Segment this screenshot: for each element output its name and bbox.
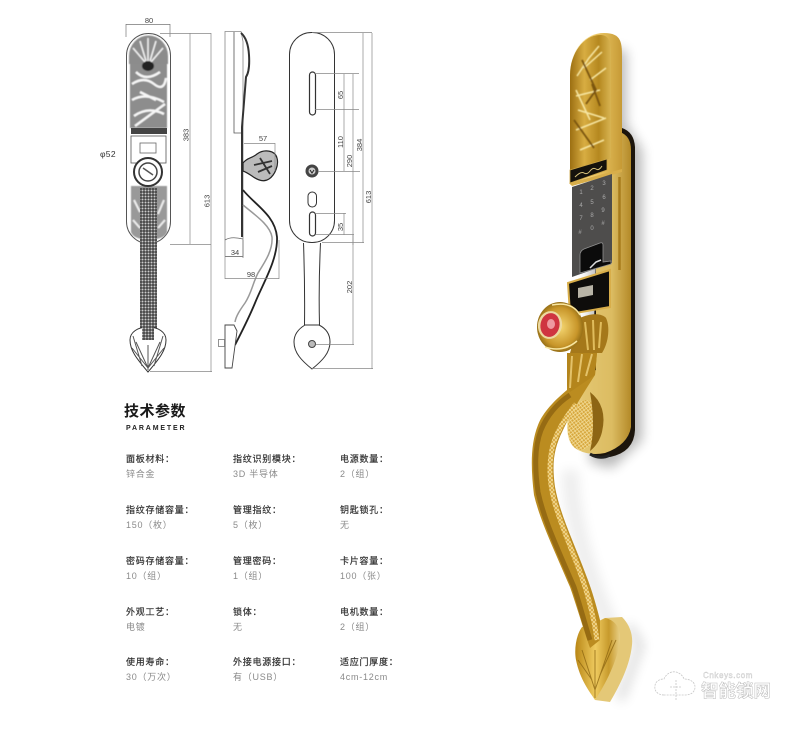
red button xyxy=(535,309,565,341)
handle scale band xyxy=(550,404,597,640)
param: admin passwords: 管理密码： xyxy=(233,556,282,566)
width dimension 80: 80 xyxy=(145,16,153,25)
upper slot xyxy=(310,72,316,115)
param: admin passwords xyxy=(233,556,282,581)
leaf veins xyxy=(578,640,616,698)
dimension 35 xyxy=(316,213,354,235)
handle dark side xyxy=(536,395,590,640)
dimension 384 xyxy=(312,32,372,243)
engraved edge xyxy=(241,33,249,237)
keypad numbers: 0 xyxy=(590,226,594,232)
back leaf end xyxy=(294,325,330,369)
side knob xyxy=(243,151,278,181)
dimension 110 xyxy=(318,110,360,172)
dimension 57: 57 xyxy=(259,134,267,143)
keypad numbers: 6 xyxy=(602,195,606,201)
keypad numbers: 5 xyxy=(590,200,594,206)
param: finish: 电镀 xyxy=(126,622,146,632)
knob neck xyxy=(570,314,608,353)
param: door thickness: 4cm-12cm xyxy=(340,672,388,682)
param: card capacity: 卡片容量： xyxy=(340,556,389,566)
back handle xyxy=(304,243,320,325)
param: motors xyxy=(340,607,389,632)
dimension 35: 35 xyxy=(336,223,345,231)
slot in rim xyxy=(618,177,621,270)
back plate dark edge xyxy=(590,125,635,457)
height dimension 613 xyxy=(150,33,212,372)
drawing: back view xyxy=(290,32,373,369)
dimension 34 xyxy=(225,240,243,258)
param: admin fingerprints: 管理指纹： xyxy=(233,505,282,515)
param: motors: 电机数量： xyxy=(340,607,389,617)
param: card capacity: 100（张） xyxy=(340,571,387,581)
dimension 65: 65 xyxy=(336,91,345,99)
knob xyxy=(537,302,583,352)
front plate outline xyxy=(126,34,170,244)
lower gold frame xyxy=(568,270,610,314)
gold bar under logo xyxy=(569,169,622,186)
diameter label: φ52 xyxy=(100,149,116,159)
keypad numbers: 1 xyxy=(579,190,583,196)
param: fingerprint capacity: 指纹存储容量： xyxy=(126,505,194,515)
param: external power: 有（USB） xyxy=(233,672,283,682)
param: lifetime xyxy=(126,656,177,682)
param: power count xyxy=(340,454,389,479)
leaf end xyxy=(130,327,166,372)
logo script mark xyxy=(575,166,602,177)
watermark url: Cnkeys.com xyxy=(703,671,753,680)
param: admin fingerprints xyxy=(233,505,282,530)
keypad numbers: # xyxy=(578,230,582,236)
dimension 290: 290 xyxy=(345,155,354,167)
fingerprint reader recess xyxy=(580,243,611,273)
param: finish: 外观工艺： xyxy=(126,607,175,617)
title: 技术参数 xyxy=(124,403,186,420)
dimension 202: 202 xyxy=(345,281,354,293)
param: lifetime: 30（万次） xyxy=(126,672,177,682)
keypad numbers: 2 xyxy=(590,186,594,192)
param: door thickness: 适应门厚度： xyxy=(340,657,399,667)
back plate xyxy=(567,132,631,454)
keypad numbers xyxy=(578,181,606,236)
dimension 57 xyxy=(244,134,275,171)
param: lock body: 锁体： xyxy=(233,607,262,617)
param: keyhole: 钥匙锁孔： xyxy=(340,505,389,515)
patterned handle xyxy=(140,188,157,333)
param: lock body: 无 xyxy=(233,622,243,632)
width dimension 80 xyxy=(126,16,170,37)
param: keyhole xyxy=(340,505,389,530)
dimension 110: 110 xyxy=(336,136,345,148)
param: lock body xyxy=(233,607,262,632)
dimension 202 xyxy=(316,235,354,345)
keypad xyxy=(572,174,612,277)
param: keyhole: 无 xyxy=(340,520,350,530)
param: panel material: 面板材料： xyxy=(126,454,175,464)
dimension 98 xyxy=(225,240,279,279)
param: power count: 2（组） xyxy=(340,469,375,479)
watermark name: 智能锁网 xyxy=(701,681,771,701)
dimension 34: 34 xyxy=(231,248,239,257)
watermark cloud xyxy=(655,672,695,700)
centre screw xyxy=(306,164,318,178)
watermark xyxy=(655,671,771,701)
param: motors: 2（组） xyxy=(340,622,375,632)
oval hole xyxy=(308,192,316,207)
param: fingerprint module xyxy=(233,454,301,479)
param: door thickness xyxy=(340,657,399,682)
drawing: front view xyxy=(100,16,212,372)
curved handle xyxy=(235,190,277,345)
dimension 613 xyxy=(312,33,373,369)
soft shadows xyxy=(590,50,642,468)
gold lock product xyxy=(532,33,642,702)
engraved upper panel xyxy=(570,35,611,177)
param: card capacity xyxy=(340,556,389,581)
back plate xyxy=(290,32,334,242)
end cap xyxy=(225,325,237,368)
handle neck texture xyxy=(567,353,597,392)
side plate xyxy=(225,32,243,256)
front body rim xyxy=(570,33,622,185)
leaf rim xyxy=(595,617,632,702)
param: admin passwords: 1（组） xyxy=(233,571,268,581)
subtitle: PARAMETER xyxy=(126,425,186,432)
param: admin fingerprints: 5（枚） xyxy=(233,520,268,530)
param: external power xyxy=(233,657,301,682)
scaled recess xyxy=(565,398,601,452)
keypad numbers: 9 xyxy=(601,208,605,214)
height dimension 613: 613 xyxy=(202,195,212,207)
param: external power: 外接电源接口： xyxy=(233,657,301,667)
height dimension 383 xyxy=(160,33,211,244)
param: fingerprint module: 3D 半导体 xyxy=(233,469,279,479)
rim bottom opening xyxy=(590,454,610,457)
parameter table xyxy=(126,454,399,682)
dimension 613: 613 xyxy=(364,191,373,203)
keypad numbers: 8 xyxy=(590,213,594,219)
knob xyxy=(134,158,162,186)
param: password capacity: 10（组） xyxy=(126,571,167,581)
keypad numbers: 4 xyxy=(579,203,583,209)
param: fingerprint capacity xyxy=(126,505,194,530)
keypad panel xyxy=(131,136,166,163)
param: panel material: 锌合金 xyxy=(126,469,155,479)
param: power count: 电源数量： xyxy=(340,454,389,464)
drawing: side view xyxy=(218,32,279,368)
keypad numbers: 3 xyxy=(602,181,606,187)
logo plate xyxy=(570,159,607,183)
sensor window xyxy=(578,285,593,298)
param: lifetime: 使用寿命： xyxy=(126,657,175,667)
dimension 384: 384 xyxy=(355,139,364,151)
keypad numbers: 7 xyxy=(579,216,583,222)
height dimension 383: 383 xyxy=(182,129,190,141)
keypad numbers: # xyxy=(601,221,605,227)
leaf face xyxy=(575,618,620,700)
dimension 98: 98 xyxy=(247,270,255,279)
param: password capacity: 密码存储容量： xyxy=(126,556,194,566)
dragon engraving xyxy=(129,35,168,240)
param: fingerprint module: 指纹识别模块： xyxy=(233,454,301,464)
param: password capacity xyxy=(126,556,194,581)
lower slot xyxy=(310,212,316,236)
dimension 65 xyxy=(315,74,359,110)
param: panel material xyxy=(126,454,175,479)
handle xyxy=(532,353,600,648)
param: finish xyxy=(126,606,175,632)
param: fingerprint capacity: 150（枚） xyxy=(126,520,173,530)
logo strip xyxy=(131,128,167,134)
